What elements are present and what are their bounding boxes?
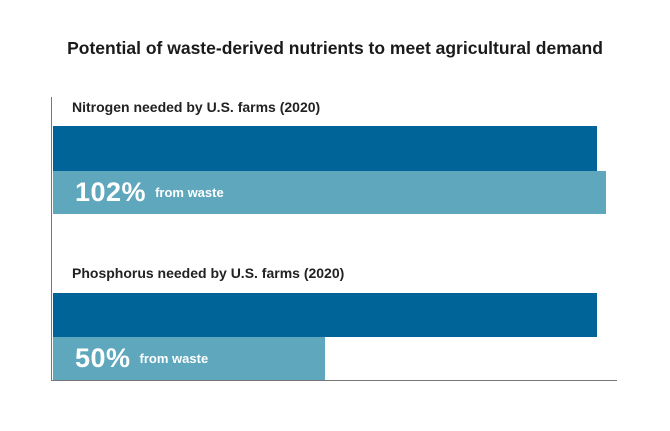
phosphorus waste bar — [53, 337, 325, 380]
phosphorus label: Phosphorus needed by U.S. farms (2020) — [72, 265, 344, 281]
nitrogen waste bar — [53, 171, 606, 214]
axes — [51, 97, 617, 381]
phosphorus demand bar — [53, 293, 597, 337]
nitrogen demand bar — [53, 126, 597, 171]
nitrogen waste bar: 102% from waste — [75, 177, 224, 207]
nitrogen label: Nitrogen needed by U.S. farms (2020) — [72, 99, 320, 115]
title: Potential of waste-derived nutrients to meet agricultural demand — [67, 38, 603, 58]
phosphorus waste bar: 50% from waste — [75, 343, 208, 373]
